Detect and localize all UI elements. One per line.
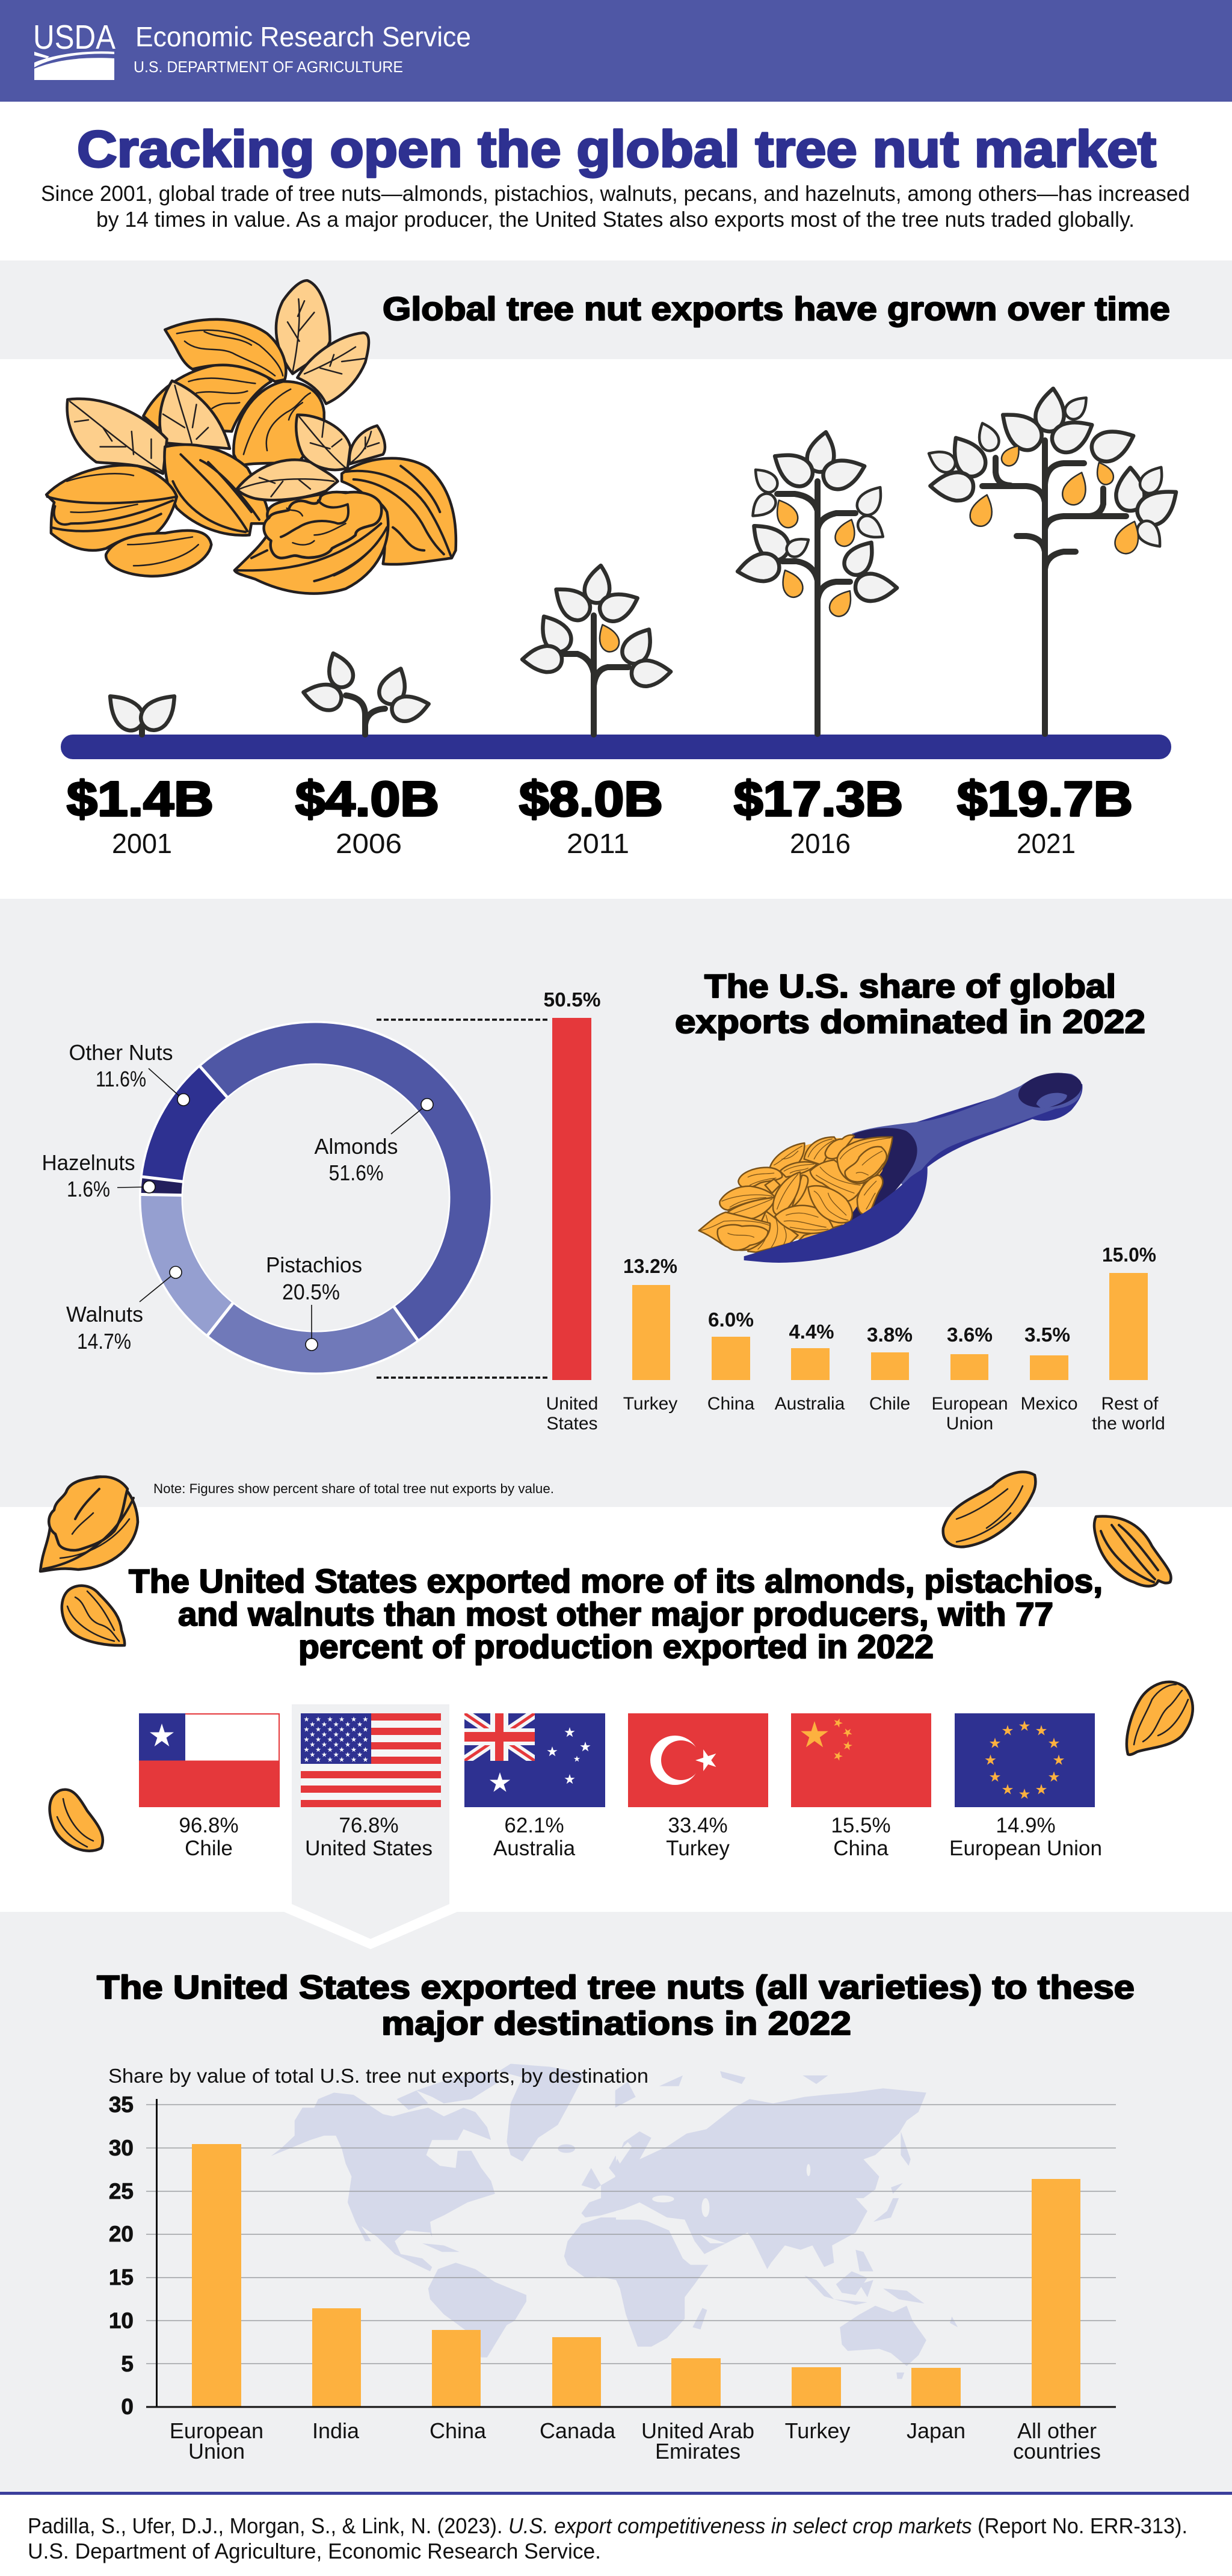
- label: European Union: European Union: [949, 1837, 1102, 1860]
- heading: production exported: and walnuts than most other major producers, with 77: [178, 1595, 1053, 1633]
- heading: global exports: Global tree nut exports have grown over time: [383, 290, 1170, 327]
- source citation: [28, 2513, 1187, 2563]
- label: hazelnuts: 1.6%: [67, 1177, 110, 1201]
- bar: Australia: Australia: [775, 1394, 845, 1414]
- y-axis labels: 35: [109, 2092, 134, 2117]
- icon: tree 2021: [924, 387, 1185, 734]
- label: Australia: [493, 1814, 576, 1860]
- bar: European Union: European: [931, 1394, 1008, 1414]
- bar: European Union: 3.6%: [947, 1323, 993, 1346]
- label: Chile: [179, 1814, 239, 1860]
- heading: major destinations: [97, 1968, 1135, 2042]
- x-axis labels: United Arab: [641, 2418, 754, 2443]
- donut chart: nut varieties: [42, 979, 534, 1416]
- bar: Rest of the world: 15.0%: [1102, 1243, 1156, 1266]
- y-axis labels: 25: [109, 2179, 134, 2204]
- bars: [192, 2144, 1080, 2407]
- illustration: almond left: [62, 1586, 125, 1645]
- flag: Turkey: [628, 1713, 768, 1860]
- bar: Chile: [867, 1323, 913, 1414]
- illustration: walnut half: [40, 1477, 138, 1571]
- panel: U.S. share of global exports: [0, 899, 1232, 1507]
- y-axis labels: 5: [121, 2352, 134, 2376]
- x-axis labels: India: [312, 2418, 360, 2443]
- label: pistachios: [266, 1253, 362, 1304]
- x-axis labels: Japan: [907, 2418, 966, 2443]
- bar: Turkey: [623, 1255, 677, 1414]
- illustration: cashew upper right: [943, 1472, 1035, 1547]
- label: China: 15.5%: [831, 1814, 891, 1837]
- bar chart: export share by country: [544, 988, 1165, 1434]
- bar: Turkey: 13.2%: [623, 1255, 677, 1277]
- label: walnuts: 14.7%: [77, 1329, 131, 1354]
- timeline values and years: $17.3B: [734, 772, 903, 827]
- bar: China: 6.0%: [708, 1308, 754, 1331]
- icon: sapling 2011: [522, 564, 672, 735]
- bar chart: U.S. exports by destination: [109, 2092, 1116, 2464]
- label: walnuts: Walnuts: [66, 1302, 143, 1327]
- panel: destinations background: [0, 1912, 1232, 2492]
- chart subtitle: Share by value of total U.S. tree nut exports, by destination: [108, 2065, 648, 2087]
- label: European Union: [949, 1814, 1102, 1860]
- map seas: [615, 2142, 810, 2265]
- label: almonds: Almonds: [314, 1134, 398, 1159]
- heading: U.S. share: [675, 967, 1145, 1040]
- illustration: cashew lower left: [50, 1790, 103, 1851]
- bar: Mexico: [1020, 1323, 1078, 1414]
- timeline values and years: 2016: [790, 828, 851, 859]
- flag: United States: [301, 1713, 441, 1860]
- label: Turkey: 33.4%: [668, 1814, 728, 1837]
- icon: scoop of nuts: [699, 1068, 1085, 1263]
- y-axis labels: 15: [109, 2265, 134, 2290]
- bar: United States: [544, 988, 600, 1434]
- label: hazelnuts: Hazelnuts: [42, 1150, 135, 1175]
- heading: U.S. share: The U.S. share of global: [704, 967, 1116, 1005]
- heading: major destinations: major destinations in 2022: [381, 2004, 851, 2042]
- label: United States: [305, 1814, 433, 1860]
- heading: major destinations: The United States exported tree nuts (all varieties) to these: [97, 1968, 1135, 2006]
- label: hazelnuts: [42, 1150, 135, 1201]
- illustration: almond right: [1127, 1682, 1193, 1755]
- icon: tree 2016: [736, 430, 898, 734]
- x-axis labels: countries: [1013, 2439, 1101, 2464]
- x-axis labels: Turkey: [785, 2418, 850, 2443]
- footer rule: [0, 2492, 1232, 2495]
- label: other nuts: Other Nuts: [69, 1040, 173, 1065]
- label: Turkey: Turkey: [666, 1837, 730, 1860]
- y-axis labels: 10: [109, 2308, 134, 2333]
- x-axis labels: China: [430, 2418, 487, 2443]
- axes: [146, 2099, 1116, 2407]
- panel: global exports heading band: [0, 260, 1232, 359]
- gridlines: [146, 2104, 1116, 2364]
- bar: United States: 50.5%: [544, 988, 600, 1011]
- background world map: [271, 2064, 958, 2379]
- x-axis labels: Union: [188, 2439, 245, 2464]
- label: pistachios: 20.5%: [282, 1280, 340, 1304]
- bar: Chile: Chile: [869, 1394, 910, 1414]
- header band: [0, 0, 1232, 102]
- bar: China: [707, 1308, 755, 1414]
- label: Chile: 96.8%: [179, 1814, 239, 1837]
- label: United States: 76.8%: [339, 1814, 399, 1837]
- bar: Chile: 3.8%: [867, 1323, 913, 1346]
- label: China: China: [833, 1837, 889, 1860]
- label: China: [831, 1814, 891, 1860]
- bar: China: China: [707, 1394, 755, 1414]
- timeline values and years: 2011: [567, 828, 629, 859]
- bar: Mexico: Mexico: [1020, 1394, 1078, 1414]
- title: Cracking open the global tree nut market: [77, 121, 1156, 178]
- intro text: by 14 times in value. As a major producer, the United States also exports most of the tree nuts traded globally.: [96, 207, 1135, 232]
- label: Turkey: [666, 1814, 730, 1860]
- timeline values and years: 2001: [112, 828, 172, 859]
- flag: Australia: [464, 1713, 605, 1860]
- bar: Rest of the world: Rest of: [1101, 1394, 1159, 1414]
- y-axis labels: 0: [121, 2394, 134, 2419]
- timeline bar: [61, 735, 1171, 759]
- bar: Rest of the world: [1092, 1243, 1165, 1434]
- label: Australia: Australia: [493, 1837, 576, 1860]
- heading: production exported: [129, 1562, 1103, 1665]
- timeline values and years: $8.0B: [519, 772, 663, 827]
- bar: United States: United: [546, 1394, 598, 1414]
- timeline values and years: $1.4B: [67, 772, 214, 827]
- bar: Australia: 4.4%: [789, 1320, 834, 1343]
- bar: European Union: [931, 1323, 1008, 1434]
- flag: China: [791, 1713, 931, 1860]
- bar: Australia: [775, 1320, 845, 1414]
- heading: production exported: percent of production exported in 2022: [298, 1628, 934, 1665]
- department name: U.S. DEPARTMENT OF AGRICULTURE: [134, 58, 403, 76]
- label: Australia: 62.1%: [504, 1814, 564, 1837]
- heading: production exported: The United States exported more of its almonds, pistachios,: [129, 1562, 1103, 1600]
- highlight column: United States with arrow: [284, 1704, 457, 1949]
- label: European Union: 14.9%: [996, 1814, 1056, 1837]
- timeline values and years: 2021: [1017, 828, 1076, 859]
- timeline values and years: [67, 772, 1133, 859]
- illustration: nuts and leaves cluster: [46, 280, 456, 594]
- illustration: pistachio right: [1094, 1517, 1171, 1586]
- x-axis labels: All other: [1017, 2418, 1097, 2443]
- bar: United States: States: [546, 1414, 598, 1434]
- heading: U.S. share: exports dominated in 2022: [675, 1003, 1145, 1040]
- USDA logo: USDA: [33, 18, 116, 57]
- dashed connector lines: [377, 1020, 550, 1378]
- intro text: [41, 181, 1190, 232]
- y-axis labels: 20: [109, 2222, 134, 2246]
- flag: European Union: [949, 1713, 1102, 1860]
- timeline values and years: $4.0B: [295, 772, 439, 827]
- source citation: Padilla, S., Ufer, D.J., Morgan, S., & Link, N. (2023). U.S. export competitiveness in select crop markets (Report No. ERR-313).: [28, 2513, 1187, 2538]
- note: Note: Figures show percent share of total tree nut exports by value.: [153, 1481, 554, 1496]
- USDA logo: [33, 18, 116, 80]
- icon: seedling 2006: [301, 649, 431, 735]
- label: United States: United States: [305, 1837, 433, 1860]
- label: almonds: 51.6%: [328, 1160, 384, 1185]
- label: Chile: Chile: [185, 1837, 233, 1860]
- source citation: U.S. Department of Agriculture, Economic Research Service.: [28, 2539, 601, 2563]
- x-axis labels: European: [170, 2418, 263, 2443]
- label: pistachios: Pistachios: [266, 1253, 362, 1277]
- label: walnuts: [66, 1302, 143, 1354]
- x-axis labels: [170, 2418, 1101, 2464]
- y-axis labels: 30: [109, 2136, 134, 2160]
- icon: sprout 2001: [100, 687, 184, 736]
- x-axis labels: Emirates: [655, 2439, 741, 2464]
- bar: European Union: Union: [946, 1414, 993, 1434]
- timeline values and years: $19.7B: [957, 772, 1133, 827]
- x-axis labels: Canada: [540, 2418, 616, 2443]
- label: other nuts: [69, 1040, 173, 1091]
- bar: Mexico: 3.5%: [1024, 1323, 1070, 1346]
- timeline values and years: 2006: [336, 828, 402, 859]
- bar: Rest of the world: the world: [1092, 1414, 1165, 1434]
- label: other nuts: 11.6%: [96, 1067, 146, 1091]
- agency name: Economic Research Service: [135, 21, 471, 52]
- label: almonds: [314, 1134, 398, 1185]
- y-axis labels: [109, 2092, 134, 2419]
- bar: Turkey: Turkey: [623, 1394, 677, 1414]
- flag: Chile: [139, 1713, 280, 1860]
- intro text: Since 2001, global trade of tree nuts—almonds, pistachios, walnuts, pecans, and hazelnuts, among others—has increased: [41, 181, 1190, 206]
